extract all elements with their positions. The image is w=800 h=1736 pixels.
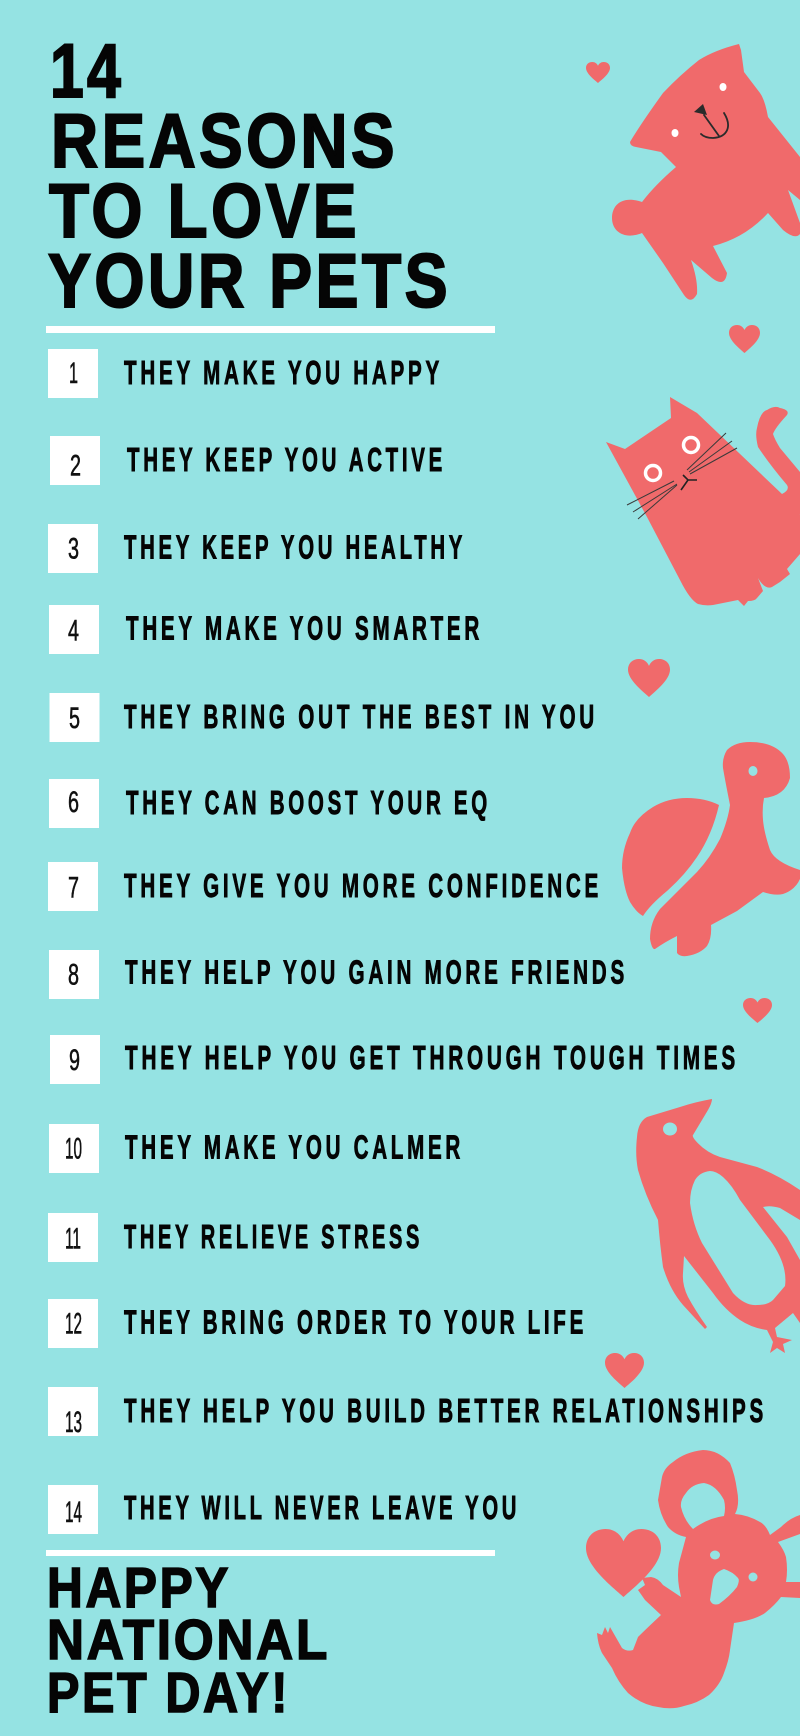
icon: koala with heart bbox=[586, 1450, 800, 1708]
reason 6 bbox=[49, 779, 491, 828]
reason 9: 9 bbox=[69, 1044, 80, 1077]
reason 11: 11 bbox=[65, 1222, 81, 1256]
reason 10 bbox=[49, 1124, 464, 1173]
reason 3 bbox=[48, 524, 466, 573]
title: TO LOVE bbox=[49, 169, 360, 254]
reason 8: 8 bbox=[68, 958, 79, 992]
icon: heart 1 bbox=[586, 62, 610, 83]
title: YOUR PETS bbox=[48, 239, 451, 324]
reason 6: THEY CAN BOOST YOUR EQ bbox=[126, 784, 491, 821]
reason 4: 4 bbox=[68, 614, 79, 648]
reason 2 bbox=[50, 436, 446, 485]
closing message: HAPPY bbox=[47, 1556, 231, 1620]
reason 8 bbox=[49, 950, 628, 999]
reason 14 bbox=[48, 1485, 520, 1534]
reason 1: 1 bbox=[69, 357, 78, 390]
reason 10: THEY MAKE YOU CALMER bbox=[125, 1128, 464, 1166]
reason 13: 13 bbox=[65, 1406, 82, 1439]
reason 12 bbox=[48, 1299, 587, 1348]
reason 7 bbox=[48, 862, 602, 911]
reason 3: THEY KEEP YOU HEALTHY bbox=[124, 528, 466, 566]
reason 11 bbox=[48, 1213, 423, 1262]
reason 11: THEY RELIEVE STRESS bbox=[124, 1218, 423, 1255]
reason 3: 3 bbox=[68, 532, 79, 566]
reason 14: THEY WILL NEVER LEAVE YOU bbox=[124, 1489, 520, 1526]
icon: heart 2 bbox=[729, 325, 760, 353]
reason 14: 14 bbox=[65, 1496, 82, 1529]
list of reasons bbox=[48, 349, 767, 1534]
reason 2: THEY KEEP YOU ACTIVE bbox=[127, 441, 446, 478]
icon: penguin bbox=[636, 1099, 800, 1353]
title: REASONS bbox=[51, 99, 398, 184]
reason 2: 2 bbox=[70, 450, 81, 482]
icon: dog bbox=[612, 44, 800, 300]
reason 4: THEY MAKE YOU SMARTER bbox=[126, 610, 483, 646]
closing message: PET DAY! bbox=[47, 1661, 290, 1725]
reason 5: 5 bbox=[69, 702, 80, 735]
reason 13 bbox=[48, 1387, 767, 1439]
icon: cat bbox=[606, 397, 800, 606]
icon: heart 5 bbox=[605, 1353, 644, 1388]
reason 12: 12 bbox=[65, 1308, 82, 1340]
reason 10: 10 bbox=[65, 1132, 82, 1166]
title bbox=[48, 29, 451, 324]
closing message bbox=[47, 1556, 330, 1725]
reason 6: 6 bbox=[68, 786, 79, 819]
icon: heart 4 bbox=[743, 998, 772, 1023]
reason 4 bbox=[49, 605, 483, 654]
title: 14 bbox=[50, 29, 124, 114]
reason 9 bbox=[50, 1035, 739, 1084]
reason 1: THEY MAKE YOU HAPPY bbox=[124, 354, 443, 391]
reason 1 bbox=[48, 349, 443, 398]
closing message: NATIONAL bbox=[47, 1608, 330, 1672]
reason 7: 7 bbox=[68, 872, 79, 904]
reason 5 bbox=[50, 693, 598, 742]
icon: turtle bbox=[622, 742, 800, 956]
icon: heart 3 bbox=[628, 659, 670, 697]
